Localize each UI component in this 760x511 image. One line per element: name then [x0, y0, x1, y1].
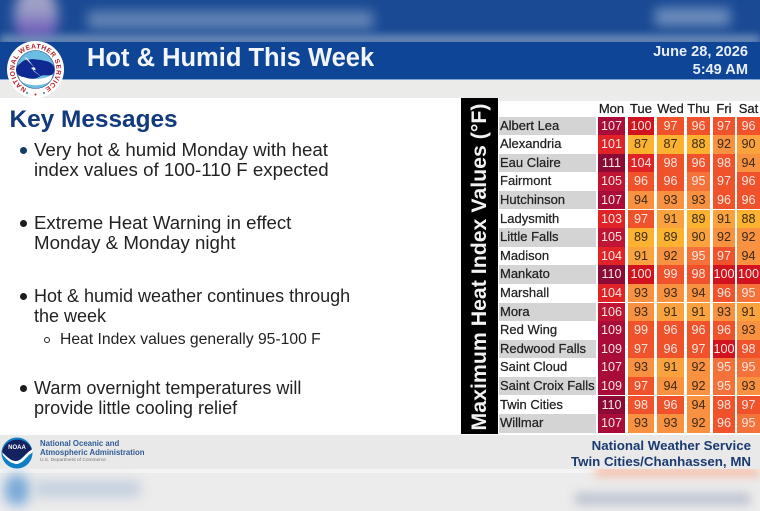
- heat index table: 91: [741, 304, 756, 318]
- heat index table: 96: [717, 193, 731, 207]
- day headers: Tue: [630, 101, 652, 116]
- rows: 96: [691, 118, 706, 132]
- agency name: Atmospheric Administration: [40, 448, 145, 456]
- heat index table: 88: [741, 212, 756, 226]
- heat index table: 91: [634, 249, 648, 263]
- heat index table: 94: [741, 249, 756, 263]
- office name: Twin Cities/Chanhassen, MN: [571, 454, 751, 468]
- gray band under header: [0, 80, 760, 98]
- heat index table: 97: [634, 212, 648, 226]
- icon: NOAA logo: NOAA: [8, 445, 26, 451]
- heat index table: 92: [717, 230, 731, 244]
- heat index table: 93: [634, 416, 648, 430]
- bullet 4: Warm overnight temperatures will: [34, 378, 301, 398]
- vertical axis title: [461, 98, 498, 434]
- heat index table: 95: [691, 174, 706, 188]
- heat index table: Little Falls: [500, 229, 559, 244]
- heat index table: 93: [741, 323, 756, 337]
- heat index table: 94: [663, 379, 678, 393]
- heat index table: 97: [691, 342, 706, 356]
- heat index table: 103: [601, 212, 622, 226]
- heat index table: 98: [691, 267, 706, 281]
- heat index table: 109: [601, 323, 622, 337]
- heat index table: 95: [717, 360, 731, 374]
- heat index table: 95: [691, 249, 706, 263]
- heat index table: 110: [601, 267, 622, 281]
- heat index table: 96: [717, 416, 731, 430]
- heat index table: 97: [634, 379, 648, 393]
- bullet 2: Monday & Monday night: [34, 232, 236, 253]
- heat index table: 98: [634, 398, 648, 412]
- rows: 100: [630, 118, 652, 132]
- heat index table: 94: [691, 286, 706, 300]
- rows: Albert Lea: [500, 118, 559, 132]
- heat index table: Willmar: [500, 415, 543, 430]
- heat index table: 91: [663, 304, 678, 318]
- bullet 1: Very hot & humid Monday with heat: [34, 139, 328, 160]
- department line: U.S. Department of Commerce: [40, 458, 106, 463]
- bullet 3: [20, 286, 350, 348]
- heat index table: 94: [691, 398, 706, 412]
- heat index table: 96: [634, 174, 648, 188]
- day headers: Sat: [739, 101, 758, 116]
- heat index table: 93: [741, 379, 756, 393]
- heat index table: 109: [601, 379, 622, 393]
- heat index table: Madison: [500, 248, 549, 263]
- heat index table: 89: [663, 230, 678, 244]
- footer band: [0, 435, 760, 469]
- heat index table: 91: [663, 212, 678, 226]
- rows: 97: [663, 118, 678, 132]
- heat index table: 95: [717, 379, 731, 393]
- bullet 1: index values of 100-110 F expected: [34, 159, 329, 180]
- sub-bullet: Heat Index values generally 95-100 F: [60, 331, 321, 348]
- heading: key messages: Key Messages: [10, 106, 178, 133]
- date and time: 5:49 AM: [693, 62, 748, 78]
- rows: 97: [717, 118, 731, 132]
- heat index table: Saint Cloud: [500, 359, 567, 374]
- heat index table: 99: [634, 323, 648, 337]
- heat index table: 95: [741, 286, 756, 300]
- date and time: [653, 44, 748, 78]
- heat index table: 94: [634, 193, 648, 207]
- heat index table: 96: [717, 286, 731, 300]
- heat index table: 95: [741, 416, 756, 430]
- office name: National Weather Service: [592, 438, 751, 453]
- heat index table: 101: [601, 137, 622, 151]
- heat index table: 87: [634, 137, 648, 151]
- vertical axis title: Maximum Heat Index Values (°F): [466, 104, 490, 430]
- heat index table: 90: [691, 230, 706, 244]
- heat index table: Eau Claire: [500, 155, 561, 170]
- heat index table: 90: [741, 137, 756, 151]
- office name: [571, 438, 751, 468]
- heat index table: 96: [741, 174, 756, 188]
- heat index table: 93: [634, 286, 648, 300]
- heat index table: 105: [601, 230, 622, 244]
- day headers: Wed: [657, 101, 684, 116]
- heat index table: 98: [741, 342, 756, 356]
- heat index table: 105: [601, 174, 622, 188]
- day headers: Mon: [599, 101, 624, 116]
- agency name: [40, 439, 145, 456]
- day headers: [599, 101, 758, 116]
- bullet 3: the week: [34, 306, 106, 326]
- heat index table: 104: [601, 249, 622, 263]
- heat index table: 95: [741, 360, 756, 374]
- heat index table: 100: [713, 342, 734, 356]
- heat index table: 109: [601, 342, 622, 356]
- heat index table: 93: [691, 193, 706, 207]
- heat index table: 97: [717, 249, 731, 263]
- heat index table: 99: [663, 267, 678, 281]
- heat index table: Marshall: [500, 285, 549, 300]
- heat index table: 96: [663, 174, 678, 188]
- heat index table: 106: [601, 304, 622, 318]
- rows: [499, 117, 760, 135]
- heat index table: 91: [717, 212, 731, 226]
- heat index table: 100: [713, 267, 734, 281]
- rows: 96: [741, 118, 756, 132]
- heat index table: 100: [630, 267, 652, 281]
- heat index table: 96: [663, 342, 678, 356]
- icon: NWS logo: NATIONAL WEATHER SERVICE: [10, 44, 62, 92]
- heat index table: 92: [663, 249, 678, 263]
- agency name: National Oceanic and: [40, 439, 119, 448]
- heat index table: 96: [691, 156, 706, 170]
- heat index table: 93: [663, 416, 678, 430]
- date and time: June 28, 2026: [653, 44, 748, 60]
- heat index table: 96: [663, 323, 678, 337]
- heat index table: Mora: [500, 304, 530, 318]
- heat index table: 98: [717, 398, 731, 412]
- bullet 3: Hot & humid weather continues through: [34, 286, 350, 306]
- heat index table: 88: [691, 137, 706, 151]
- heat index table: 96: [663, 398, 678, 412]
- heat index table: 92: [691, 360, 706, 374]
- heat index table: Saint Croix Falls: [500, 378, 595, 393]
- heat index table: 97: [741, 398, 756, 412]
- heat index table: 92: [691, 379, 706, 393]
- heat index table: Mankato: [500, 266, 550, 281]
- heat index table: 96: [717, 323, 731, 337]
- heat index table: 98: [717, 156, 731, 170]
- header banner: [0, 42, 760, 80]
- heat index table: 92: [717, 137, 731, 151]
- day headers: Fri: [716, 101, 732, 116]
- heat index table: 104: [630, 156, 652, 170]
- heat index table: 93: [634, 304, 648, 318]
- rows: 107: [601, 118, 622, 132]
- heat index table: 107: [601, 416, 622, 430]
- heat index table: 91: [691, 304, 706, 318]
- heat index table: 96: [691, 323, 706, 337]
- heat index table: 89: [691, 212, 706, 226]
- heat index table: 87: [663, 137, 678, 151]
- heat index table: 107: [601, 193, 622, 207]
- table header strip: [499, 98, 760, 101]
- blurred bottom band: [0, 469, 760, 511]
- heat index table: 97: [717, 174, 731, 188]
- heat index table: Twin Cities: [500, 396, 563, 412]
- heat index table: 110: [601, 398, 622, 412]
- heat index table: 111: [602, 156, 621, 170]
- bullet 1: [20, 139, 329, 180]
- heat index table: 92: [691, 416, 706, 430]
- heat index table: 89: [634, 230, 648, 244]
- heat index table: 104: [601, 286, 622, 300]
- heat index table: 92: [741, 230, 756, 244]
- title: Hot & Humid This Week: [87, 44, 374, 72]
- heat index table: Ladysmith: [500, 210, 559, 226]
- heat index table: Fairmont: [500, 173, 551, 188]
- blurred top band: [0, 0, 760, 42]
- heat index table: Hutchinson: [500, 192, 565, 207]
- heat index table: 98: [663, 156, 678, 170]
- heat index table: Redwood Falls: [500, 341, 586, 356]
- heat index table: 93: [717, 304, 731, 318]
- heat index table: 100: [738, 267, 759, 281]
- day headers: Thu: [687, 101, 710, 116]
- bullet 4: provide little cooling relief: [34, 398, 237, 418]
- bullet 2: [20, 212, 292, 253]
- heat index table: 94: [741, 156, 756, 170]
- heat index table: Alexandria: [500, 136, 561, 151]
- heat index table: 93: [663, 286, 678, 300]
- heat index table: 91: [663, 360, 678, 374]
- bullet 2: Extreme Heat Warning in effect: [34, 212, 291, 233]
- heat index table: 97: [634, 342, 648, 356]
- heat index table: 93: [663, 193, 678, 207]
- icon: NOAA logo: [2, 438, 33, 468]
- bullet 4: [20, 378, 301, 418]
- heat index table: 107: [601, 360, 622, 374]
- heat index table: 96: [741, 193, 756, 207]
- heat index table: 93: [634, 360, 648, 374]
- heat index table: Red Wing: [500, 322, 557, 337]
